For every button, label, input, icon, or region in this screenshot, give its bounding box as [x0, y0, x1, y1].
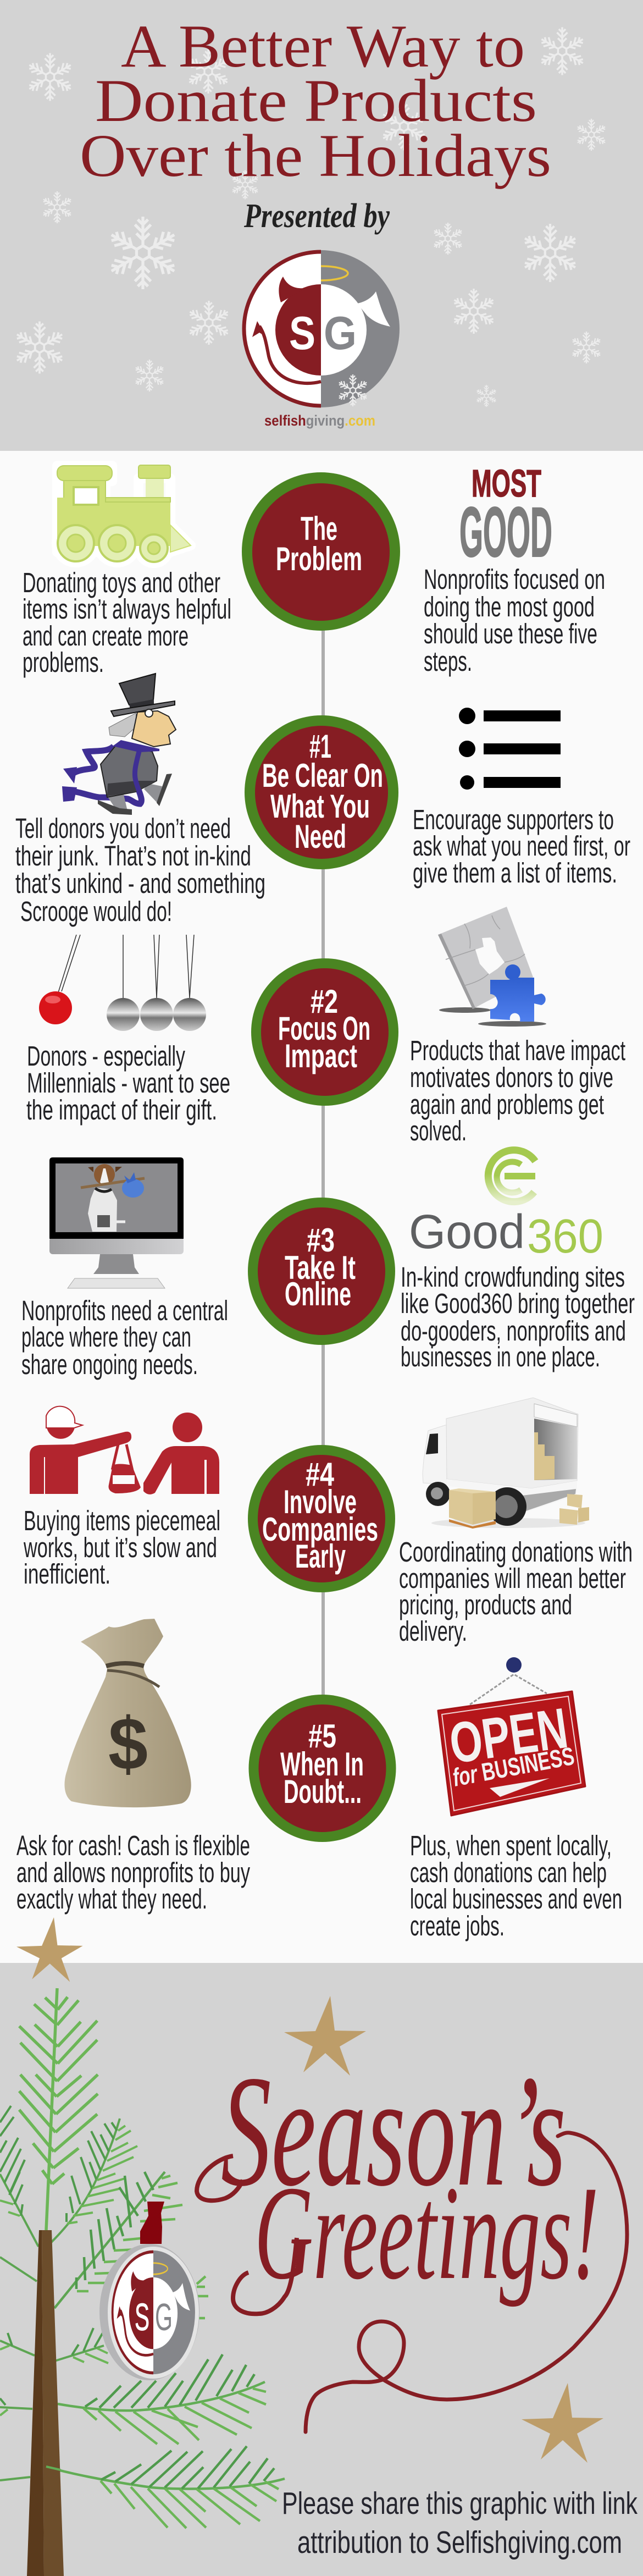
text: #2 right: solved.: [410, 1115, 467, 1146]
text: #3 left: [21, 1295, 228, 1380]
heading circle: #4: #4: [306, 1456, 334, 1493]
icon: open for business sign: OPEN: [446, 1696, 572, 1776]
icon: money bag: [64, 1619, 191, 1807]
step: #5 when in doubt: [16, 1619, 622, 1941]
star upper: [284, 1996, 366, 2076]
large right frond: [58, 2354, 266, 2444]
text: #2 left: [26, 1040, 230, 1126]
icon: newton's cradle: [39, 935, 206, 1031]
bottom right frond: [46, 2446, 285, 2528]
heading circle: #3: #3: [307, 1222, 335, 1259]
icon: people handing bag: [30, 1406, 219, 1494]
text: problem left: problems.: [23, 647, 104, 678]
heading circle: #5: When In: [280, 1746, 364, 1783]
step: #4 involve companies: [23, 1398, 633, 1647]
text: problem right: [424, 564, 605, 677]
logo: most good: MOST: [472, 462, 541, 505]
icon: open for business sign: for BUSINESS: [450, 1741, 577, 1792]
text: #4 left: [23, 1505, 220, 1590]
text: #4 left: works, but it’s slow and: [23, 1532, 217, 1563]
timeline connector: [322, 627, 325, 1770]
heading circle: #4: Companies: [262, 1511, 378, 1548]
icon: delivery truck: [423, 1398, 589, 1529]
heading circle: #3: [248, 1198, 395, 1345]
text: #4 left: inefficient.: [24, 1558, 110, 1590]
heading circle: The Problem: The: [301, 510, 337, 547]
star lower: [522, 2383, 603, 2463]
text: #1 left: Tell donors you don’t need: [15, 813, 231, 844]
text: #4 right: delivery.: [399, 1615, 467, 1647]
heading circle: #5: [248, 1695, 396, 1842]
low side fronds: [0, 2257, 108, 2480]
text: #1 right: [413, 804, 630, 889]
heading circle: #3: Online: [285, 1276, 351, 1312]
logo: good360: Good: [409, 1205, 525, 1259]
heading circle: #5: #5: [308, 1718, 336, 1755]
text: #2 left: Donors - especially: [27, 1040, 185, 1072]
text: #1 left: Scrooge would do!: [20, 896, 172, 927]
share note: [282, 2486, 638, 2560]
icon: puzzle: [438, 907, 546, 1027]
heading circle: #2: [251, 958, 398, 1106]
logo: good360: 360: [527, 1210, 603, 1263]
icon: toy train: [57, 465, 191, 563]
heading circle: #4: [248, 1445, 395, 1592]
text: #5 left: exactly what they need.: [16, 1883, 207, 1915]
text: #1 left: their junk. That’s not in-kind: [15, 840, 251, 871]
icon: money bag: $: [108, 1702, 148, 1785]
upper left frond: [0, 2106, 38, 2247]
icon: open for business sign: [438, 1657, 585, 1816]
logo: selfish giving: S: [289, 307, 315, 360]
heading circle: #1: #1: [309, 728, 331, 765]
heading circle: #5: Doubt...: [284, 1773, 362, 1810]
title: Over the Holidays: [80, 122, 551, 189]
step: the problem: [23, 462, 605, 678]
title: Donate Products: [95, 67, 537, 134]
text: #2 right: [410, 1035, 625, 1146]
heading circle: #1: [245, 715, 398, 869]
upper right frond: [43, 2119, 137, 2250]
text: #5 left: and allows nonprofits to buy: [16, 1857, 250, 1888]
heading circle: #3: Take It: [285, 1249, 356, 1286]
text: #5 right: [410, 1830, 622, 1941]
step: #3 take it online: [21, 1150, 635, 1380]
top frond: [19, 1988, 98, 2230]
snowflake over logo: [337, 374, 368, 406]
presented by: Presented by: [243, 197, 390, 235]
star top of tree: [16, 1917, 83, 1982]
text: #5 left: [16, 1830, 250, 1915]
text: #4 left: Buying items piecemeal: [24, 1505, 220, 1536]
text: problem left: and can create more: [23, 620, 189, 652]
icon: list: [459, 708, 561, 790]
step: #1 be clear: [15, 674, 630, 927]
text: #5 right: create jobs.: [410, 1910, 505, 1941]
heading circle: #1: Need: [295, 818, 346, 855]
heading circle: The Problem: Problem: [276, 540, 362, 577]
text: #1 left: [15, 813, 265, 927]
christmas tree: [0, 1988, 285, 2576]
middle right frond: [54, 2172, 208, 2318]
ornament with logo: [99, 2202, 199, 2380]
tree trunk: [27, 2230, 44, 2576]
season's greetings lettering: [197, 2043, 627, 2432]
heading circle: #1: What You: [270, 788, 370, 825]
logo caption: selfishgiving.com: [264, 412, 375, 429]
icon: scrooge: [62, 674, 176, 815]
heading circle: #2: Focus On: [278, 1010, 370, 1047]
panel: header: [0, 0, 643, 451]
text: #3 right: [401, 1261, 635, 1372]
text: #4 right: [399, 1536, 633, 1647]
heading circle: #4: Early: [295, 1538, 346, 1575]
text: #5 left: Ask for cash! Cash is flexible: [16, 1830, 250, 1861]
ornament with logo: S: [135, 2296, 149, 2338]
panel: footer: [0, 1917, 643, 2576]
text: #1 left: that’s unkind - and something: [15, 868, 265, 899]
step: #2 focus on impact: [26, 907, 625, 1146]
ornament with logo: G: [155, 2296, 173, 2338]
heading circle: #4: Involve: [284, 1483, 357, 1520]
heading circle: #1: Be Clear On: [262, 757, 383, 794]
text: problem right: steps.: [424, 646, 472, 677]
text: #3 left: share ongoing needs.: [21, 1349, 198, 1380]
heading circle: The Problem: [242, 472, 400, 631]
snowflakes: [14, 27, 607, 407]
text: #3 left: Nonprofits need a central: [21, 1295, 228, 1326]
logo: good360: [409, 1150, 603, 1263]
text: #2 left: the impact of their gift.: [26, 1094, 217, 1126]
text: #3 left: place where they can: [21, 1321, 191, 1353]
text: #2 left: Millennials - want to see: [27, 1067, 230, 1099]
heading circle: #2: Impact: [285, 1038, 357, 1074]
text: problem left: Donating toys and other: [23, 567, 220, 598]
title: A Better Way to: [121, 13, 525, 80]
logo: selfish giving: [244, 250, 400, 407]
logo: selfish giving: G: [324, 307, 357, 360]
heading circle: #2: #2: [311, 983, 338, 1020]
icon: computer with dog: [49, 1157, 184, 1288]
text: problem left: [23, 567, 231, 678]
title: [80, 13, 551, 189]
text: problem left: items isn’t always helpful: [23, 593, 231, 625]
logo: most good: [459, 462, 552, 572]
